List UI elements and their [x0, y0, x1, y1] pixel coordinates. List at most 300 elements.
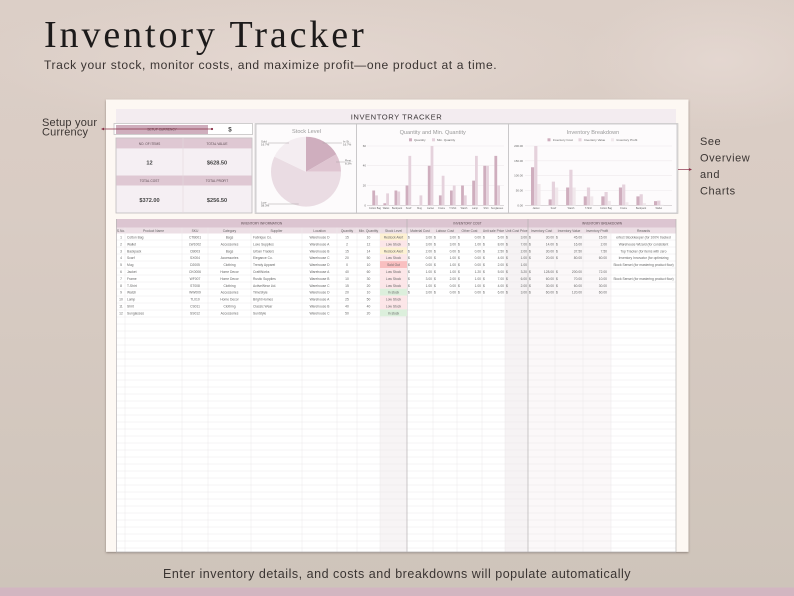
- panel: stock level pie chart: Low: [261, 200, 267, 204]
- column: product names: T-Shirt: [127, 284, 137, 288]
- column: product names: Sunglasses: [127, 311, 144, 315]
- column: min quantity: 20: [367, 284, 370, 288]
- panel: inventory breakdown bar chart: Watch: [568, 207, 575, 210]
- column: labour cost: $: [434, 291, 436, 295]
- column: location: Warehouse D: [309, 263, 330, 267]
- column: other cost: $: [458, 236, 460, 240]
- column: labour cost: $: [434, 284, 436, 288]
- column: unit cost price: $: [506, 256, 508, 260]
- column: inventory value: 200.00: [572, 270, 582, 274]
- column: material cost: $: [408, 249, 410, 253]
- column: quantity: 40: [345, 270, 349, 274]
- column: material cost: $: [408, 242, 410, 246]
- panel: setup currency: $: [228, 126, 232, 134]
- column: product names: Mug: [127, 263, 134, 267]
- column: unit cost price: $: [506, 277, 508, 281]
- column: inventory cost: 30.00: [546, 249, 554, 253]
- column: stock level: Low Stock: [386, 242, 401, 246]
- panel: inventory breakdown bar chart: Inventory Value: [584, 138, 606, 142]
- column: unit sale price: $: [483, 256, 485, 260]
- panel: stock level pie chart: Rest..: [345, 158, 353, 162]
- column: stock level: Low Stock: [386, 256, 401, 260]
- column: rewards: erfect Stockkeeper (for 100% tracked: [616, 236, 671, 240]
- sheet heading: [116, 109, 676, 123]
- column: unit cost price: 3.00: [521, 236, 527, 240]
- column: min quantity: 12: [367, 242, 370, 246]
- column: unit cost price: 3.00: [521, 291, 527, 295]
- column: unit cost price: $: [506, 291, 508, 295]
- column: serial numbers: 9: [120, 291, 122, 295]
- column: stock level: Low Stock: [386, 298, 401, 302]
- panel: inventory breakdown bar chart: Backpack: [636, 207, 647, 210]
- column: quantity: 2: [346, 242, 348, 246]
- column: unit cost price: $: [506, 249, 508, 253]
- arrow: overview and charts: [678, 168, 692, 171]
- column headers: Stock Level: [385, 229, 402, 233]
- column: rewards: Stock Sensei (for mastering product flow): [613, 277, 674, 281]
- column: material cost: 3.00: [426, 236, 432, 240]
- column: material cost: 2.00: [426, 249, 432, 253]
- column: serial numbers: 1: [120, 236, 122, 240]
- panel: inventory breakdown bar chart: Scarf: [551, 207, 557, 210]
- callout: see overview and charts: Charts: [700, 186, 736, 198]
- column: category: Bags: [226, 236, 234, 240]
- column: serial numbers: [119, 236, 123, 315]
- column: inventory cost: $: [529, 291, 531, 295]
- column: unit sale price: 6.00: [498, 291, 504, 295]
- column: supplier: Luxe Supplies: [253, 242, 274, 246]
- column headers: Product Name: [143, 229, 164, 233]
- panel: quantity and min quantity bar chart: 0: [364, 203, 366, 207]
- column: material cost: 3.00: [426, 277, 432, 281]
- column: unit cost price: 2.00: [521, 284, 527, 288]
- column: inventory profit: 60.00: [599, 256, 607, 260]
- column headers: S.No.: [117, 229, 125, 233]
- column: product names: Frame: [127, 277, 137, 281]
- column: rewards: Inventory Innovator (for optimizing: [619, 256, 669, 260]
- column: category: Home Decor: [220, 277, 240, 281]
- column: material cost: $: [408, 263, 410, 267]
- column: material cost: $: [408, 270, 410, 274]
- column: unit cost price: $: [506, 242, 508, 246]
- column: inventory value: 45.00: [574, 236, 582, 240]
- column: product names: [127, 236, 144, 315]
- column: unit sale price: $: [483, 263, 485, 267]
- column: inventory profit: 10.00: [599, 277, 607, 281]
- panel: inventory breakdown bar chart: 50.00: [516, 188, 523, 192]
- panel: stock level pie chart: In St..: [343, 140, 351, 144]
- column: product names: Backpack: [127, 249, 142, 253]
- column: other cost: $: [458, 242, 460, 246]
- column: labour cost: $: [434, 242, 436, 246]
- column: inventory profit: [599, 236, 607, 295]
- column: location: Warehouse C: [309, 284, 330, 288]
- panel: quantity and min quantity bar chart: [356, 124, 508, 213]
- panel: quantity and min quantity bar chart: Lamp: [472, 207, 479, 210]
- column: category: Home Decor: [220, 298, 240, 302]
- column: inventory cost: 60.00: [546, 291, 554, 295]
- column headers: Other Cost: [462, 229, 478, 233]
- panel: stock level pie chart: 16.7%: [343, 142, 352, 146]
- column headers: Location: [313, 229, 326, 233]
- column: unit sale price: 7.00: [498, 277, 504, 281]
- column: location: Warehouse D: [309, 291, 330, 295]
- column: other cost: $: [458, 249, 460, 253]
- column: inventory cost: [529, 236, 554, 295]
- column: inventory value: 70.00: [574, 277, 582, 281]
- column: inventory value: $: [556, 270, 558, 274]
- column headers: Min. Quantity: [359, 229, 379, 233]
- column: min quantity: 60: [367, 270, 370, 274]
- panel: KPI cards: TOTAL COST: [140, 179, 159, 183]
- column headers: Labour Cost: [436, 229, 454, 233]
- table grid: [116, 219, 676, 552]
- column headers: Category: [223, 229, 237, 233]
- column: other cost: $: [458, 270, 460, 274]
- column: product names: Shirt: [127, 304, 134, 308]
- panel: inventory breakdown bar chart: Inventory Breakdown: [567, 130, 619, 136]
- column headers: Inventory Value: [558, 229, 580, 233]
- column: category: Clothing: [223, 263, 236, 267]
- panel: quantity and min quantity bar chart: Cotton Bag: [369, 207, 382, 210]
- column: unit sale price: $: [483, 291, 485, 295]
- column: location: Warehouse A: [310, 298, 330, 302]
- column: stock level: [384, 236, 403, 315]
- column: quantity: 15: [345, 249, 349, 253]
- panel: inventory breakdown bar chart: Inventory Profit: [616, 138, 637, 142]
- column: stock level: Restock Alert: [384, 236, 403, 240]
- column: labour cost: $: [434, 270, 436, 274]
- column: SKU: CS011: [190, 304, 200, 308]
- column: serial numbers: 2: [120, 242, 122, 246]
- column: labour cost: 2.00: [450, 277, 456, 281]
- column: material cost: $: [408, 256, 410, 260]
- column: unit cost price: $: [506, 236, 508, 240]
- panel: KPI cards: 12: [146, 160, 153, 166]
- panel: quantity and min quantity bar chart: 20: [363, 184, 366, 188]
- column: inventory value: $: [556, 291, 558, 295]
- column: unit sale price: $: [483, 242, 485, 246]
- callout: setup your currency: Currency: [42, 126, 89, 138]
- column: other cost: $: [458, 263, 460, 267]
- column: unit cost price: [506, 236, 527, 295]
- column: unit cost price: 7.00: [521, 242, 527, 246]
- column: product names: Lamp: [127, 298, 135, 302]
- column: unit sale price: $: [483, 270, 485, 274]
- callout: setup your currency: Setup your: [42, 117, 97, 129]
- panel: quantity and min quantity bar chart: Quantity: [414, 138, 426, 142]
- column: inventory profit: 60.00: [599, 291, 607, 295]
- column: labour cost: 0.00: [450, 249, 456, 253]
- column: other cost: 1.00: [475, 284, 481, 288]
- panel: quantity and min quantity bar chart: Quantity and Min. Quantity: [400, 130, 466, 136]
- column: SKU: CTB001: [189, 236, 201, 240]
- column: labour cost: 0.00: [450, 284, 456, 288]
- column: serial numbers: 8: [120, 284, 122, 288]
- panel: inventory breakdown bar chart: Inventory Cost: [553, 138, 573, 142]
- column: inventory value: 80.00: [574, 256, 582, 260]
- column: labour cost: [434, 236, 456, 295]
- frame: charts highlight: [255, 124, 678, 214]
- column: quantity: 25: [345, 298, 349, 302]
- column: SKU: CB003: [190, 249, 200, 253]
- panel: setup currency: [114, 124, 252, 134]
- column: other cost: $: [458, 256, 460, 260]
- column: inventory cost: 128.00: [544, 270, 554, 274]
- column: quantity: 40: [345, 304, 349, 308]
- column headers: Inventory Cost: [531, 229, 552, 233]
- caption: Enter inventory details, and costs and breakdowns will populate automatically: [163, 567, 631, 581]
- column: location: Warehouse A: [310, 242, 330, 246]
- column: material cost: $: [408, 277, 410, 281]
- column: other cost: [458, 236, 481, 295]
- column: inventory cost: $: [529, 242, 531, 246]
- callout: see overview and charts: Overview: [700, 152, 750, 164]
- column: stock level: Sold Out: [387, 263, 400, 267]
- column: inventory profit: 30.00: [599, 284, 607, 288]
- column: material cost: $: [408, 291, 410, 295]
- column: serial numbers: 4: [120, 256, 122, 260]
- column: serial numbers: 3: [120, 249, 122, 253]
- panel: KPI cards: TOTAL VALUE: [207, 142, 227, 146]
- column: labour cost: 1.00: [450, 270, 456, 274]
- column: material cost: [408, 236, 432, 295]
- column: unit sale price: 5.00: [498, 270, 504, 274]
- column: serial numbers: 6: [120, 270, 122, 274]
- panel: inventory breakdown bar chart: 200.00: [514, 144, 523, 148]
- column: supplier: Elegance Co.: [253, 256, 273, 260]
- column: labour cost: 1.00: [450, 256, 456, 260]
- column: min quantity: 10: [367, 291, 370, 295]
- column: quantity: 50: [345, 311, 349, 315]
- column: SKU: WW009: [189, 291, 201, 295]
- column: unit sale price: $: [483, 277, 485, 281]
- panel: inventory breakdown bar chart: 0.00: [517, 203, 523, 207]
- panel: KPI cards: $628.50: [207, 160, 227, 166]
- stock level status cells: [380, 234, 407, 316]
- panel: quantity and min quantity bar chart: Backpack: [392, 207, 403, 210]
- column: material cost: $: [408, 284, 410, 288]
- panel: quantity and min quantity bar chart: Mug: [417, 207, 422, 210]
- panel: quantity and min quantity bar chart: Watch: [461, 207, 468, 210]
- column: min quantity: 20: [367, 311, 370, 315]
- column: material cost: 3.00: [426, 291, 432, 295]
- column: SKU: CK0006: [189, 270, 201, 274]
- column: quantity: 0: [346, 263, 348, 267]
- column: category: [220, 236, 240, 315]
- column: min quantity: [367, 236, 370, 315]
- column: supplier: ActiveWear Ltd.: [253, 284, 276, 288]
- callout: see overview and charts: and: [700, 169, 720, 181]
- panel: inventory breakdown bar chart: T-Shirt: [585, 207, 592, 210]
- panel: quantity and min quantity bar chart: 40: [363, 164, 366, 168]
- column: unit cost price: $: [506, 284, 508, 288]
- column: inventory value: $: [556, 249, 558, 253]
- panel: quantity and min quantity bar chart: Scarf: [406, 207, 412, 210]
- panel: stock level pie chart: 8.3%: [345, 162, 352, 166]
- column: inventory cost: $: [529, 284, 531, 288]
- column: unit cost price: 3.20: [521, 270, 527, 274]
- column: unit sale price: $: [483, 249, 485, 253]
- arrow: setup currency: [101, 128, 213, 130]
- panel: inventory breakdown bar chart: [508, 124, 677, 213]
- table shaded columns: [380, 233, 611, 552]
- table header bands: INVENTORY COST: [453, 222, 482, 226]
- column: quantity: 10: [345, 277, 349, 281]
- column: SKU: ST008: [190, 284, 200, 288]
- panel: KPI cards: $372.00: [139, 198, 160, 204]
- column: inventory value: 60.00: [574, 284, 582, 288]
- column: location: Warehouse B: [310, 304, 330, 308]
- column: inventory profit: 72.00: [599, 270, 607, 274]
- column: other cost: $: [458, 291, 460, 295]
- column: material cost: 1.00: [426, 284, 432, 288]
- column: stock level: Low Stock: [386, 284, 401, 288]
- panel: inventory breakdown bar chart: Cotton Bag: [600, 207, 613, 210]
- column: supplier: Rustic Supplies: [253, 277, 276, 281]
- panel: quantity and min quantity bar chart: Sunglasses: [491, 207, 504, 210]
- table header bands: INVENTORY BREAKDOWN: [582, 222, 623, 226]
- column: unit cost price: 2.00: [521, 249, 527, 253]
- column: product names: Jacket: [127, 270, 137, 274]
- column: quantity: 15: [345, 236, 349, 240]
- column headers: Quantity: [341, 229, 353, 233]
- column: unit cost price: 1.00: [521, 256, 527, 260]
- column: quantity: 20: [345, 256, 349, 260]
- column: inventory profit: 7.50: [601, 249, 607, 253]
- column: min quantity: 14: [367, 249, 370, 253]
- column: SKU: SS012: [190, 311, 200, 315]
- panel: stock level pie chart: 58.3%: [261, 204, 270, 208]
- column: unit sale price: 5.00: [498, 236, 504, 240]
- column: inventory cost: $: [529, 256, 531, 260]
- column: unit sale price: [483, 236, 504, 295]
- column: labour cost: $: [434, 249, 436, 253]
- column: category: Accessories: [221, 311, 239, 315]
- column: supplier: Urban Traders: [253, 249, 274, 253]
- column: min quantity: 40: [367, 304, 370, 308]
- column: other cost: $: [458, 284, 460, 288]
- column: inventory cost: $: [529, 277, 531, 281]
- column headers: Rewards: [637, 229, 650, 233]
- column: location: Warehouse C: [309, 256, 330, 260]
- column: category: Bags: [226, 249, 234, 253]
- bottom band: [0, 588, 794, 596]
- panel: KPI cards: [116, 138, 252, 213]
- column: stock level: Low Stock: [386, 304, 401, 308]
- column: other cost: 1.00: [475, 242, 481, 246]
- callout: see overview and charts: See: [700, 136, 721, 148]
- panel: quantity and min quantity bar chart: Shirt: [484, 207, 489, 210]
- column: inventory value: 120.00: [572, 291, 582, 295]
- panel: inventory table: [116, 219, 676, 552]
- table header bands: [116, 219, 676, 234]
- column: inventory value: 37.50: [574, 249, 582, 253]
- column: unit sale price: $: [483, 284, 485, 288]
- panel: KPI cards: $256.50: [207, 198, 227, 204]
- column: supplier: Trendy Apparel: [253, 263, 276, 267]
- column headers: [117, 229, 650, 233]
- column: supplier: CraftWorks: [253, 270, 270, 274]
- column: unit cost price: $: [506, 263, 508, 267]
- column: unit sale price: 2.50: [498, 249, 504, 253]
- column: category: Accessories: [221, 291, 239, 295]
- column: stock level: Restock Alert: [384, 249, 403, 253]
- column: serial numbers: 12: [119, 311, 123, 315]
- column: material cost: 0.00: [426, 263, 432, 267]
- column: product names: Scarf: [127, 256, 135, 260]
- column: inventory cost: 14.00: [546, 242, 554, 246]
- column headers: Supplier: [270, 229, 283, 233]
- column: supplier: [253, 236, 276, 315]
- column: location: Warehouse B: [310, 249, 330, 253]
- column: inventory cost: 20.00: [546, 256, 554, 260]
- column headers: Inventory Profit: [586, 229, 608, 233]
- panel: stock level pie chart: Sold: [261, 140, 267, 144]
- column: rewards: [613, 236, 674, 281]
- panel: stock level pie chart: [256, 124, 356, 213]
- column: inventory value: 16.00: [574, 242, 582, 246]
- panel: KPI cards: NO. OF ITEMS: [139, 142, 160, 146]
- column headers: Unit sale Price: [483, 229, 504, 233]
- panel: inventory breakdown bar chart: 150.00: [514, 159, 523, 163]
- column: labour cost: $: [434, 277, 436, 281]
- column: other cost: $: [458, 277, 460, 281]
- column: rewards: Warehouse Wizard (for consistent: [619, 242, 668, 246]
- callout: setup your currency: [42, 117, 97, 138]
- panel: quantity and min quantity bar chart: T-Shirt: [449, 207, 457, 210]
- column: location: Warehouse B: [310, 277, 330, 281]
- column: SKU: WF007: [190, 277, 200, 281]
- panel: stock level pie chart: 16.7%: [261, 142, 270, 146]
- column: min quantity: 10: [367, 263, 370, 267]
- column: other cost: 0.00: [475, 291, 481, 295]
- sheet heading: INVENTORY TRACKER: [351, 112, 442, 122]
- column: min quantity: 30: [367, 277, 370, 281]
- table header bands: INVENTORY INFORMATION: [241, 222, 283, 226]
- column: other cost: 1.20: [475, 270, 481, 274]
- panel: setup currency: SETUP CURRENCY: [147, 128, 178, 132]
- column: material cost: 1.00: [426, 270, 432, 274]
- column: labour cost: $: [434, 256, 436, 260]
- column: SKU: SX004: [190, 256, 200, 260]
- column: unit sale price: 4.00: [498, 284, 504, 288]
- column: unit sale price: 2.00: [498, 263, 504, 267]
- column: quantity: [345, 236, 349, 315]
- column: stock level: Low Stock: [386, 277, 401, 281]
- column: serial numbers: 7: [120, 277, 122, 281]
- column: category: Accessories: [221, 242, 239, 246]
- column: category: Clothing: [223, 284, 236, 288]
- callout: see overview and charts: [700, 136, 750, 198]
- column: supplier: Classic Wear: [253, 304, 273, 308]
- column: category: Accessories: [221, 256, 239, 260]
- column: inventory cost: $: [529, 249, 531, 253]
- column: unit sale price: 4.00: [498, 256, 504, 260]
- column: supplier: Bright Homes: [253, 298, 273, 302]
- column: quantity: 20: [345, 291, 349, 295]
- column: min quantity: 50: [367, 256, 370, 260]
- subtitle: Track your stock, monitor costs, and maximize profit—one product at a time.: [44, 58, 497, 72]
- panel: KPI cards: TOTAL PROFIT: [206, 179, 228, 183]
- panel: spreadsheet sheet: [106, 100, 688, 552]
- column: category: Home Decor: [220, 270, 240, 274]
- column: unit cost price: 6.00: [521, 277, 527, 281]
- column headers: SKU: [192, 229, 199, 233]
- column: inventory value: $: [556, 242, 558, 246]
- column: category: Clothing: [223, 304, 236, 308]
- column: serial numbers: 11: [119, 304, 123, 308]
